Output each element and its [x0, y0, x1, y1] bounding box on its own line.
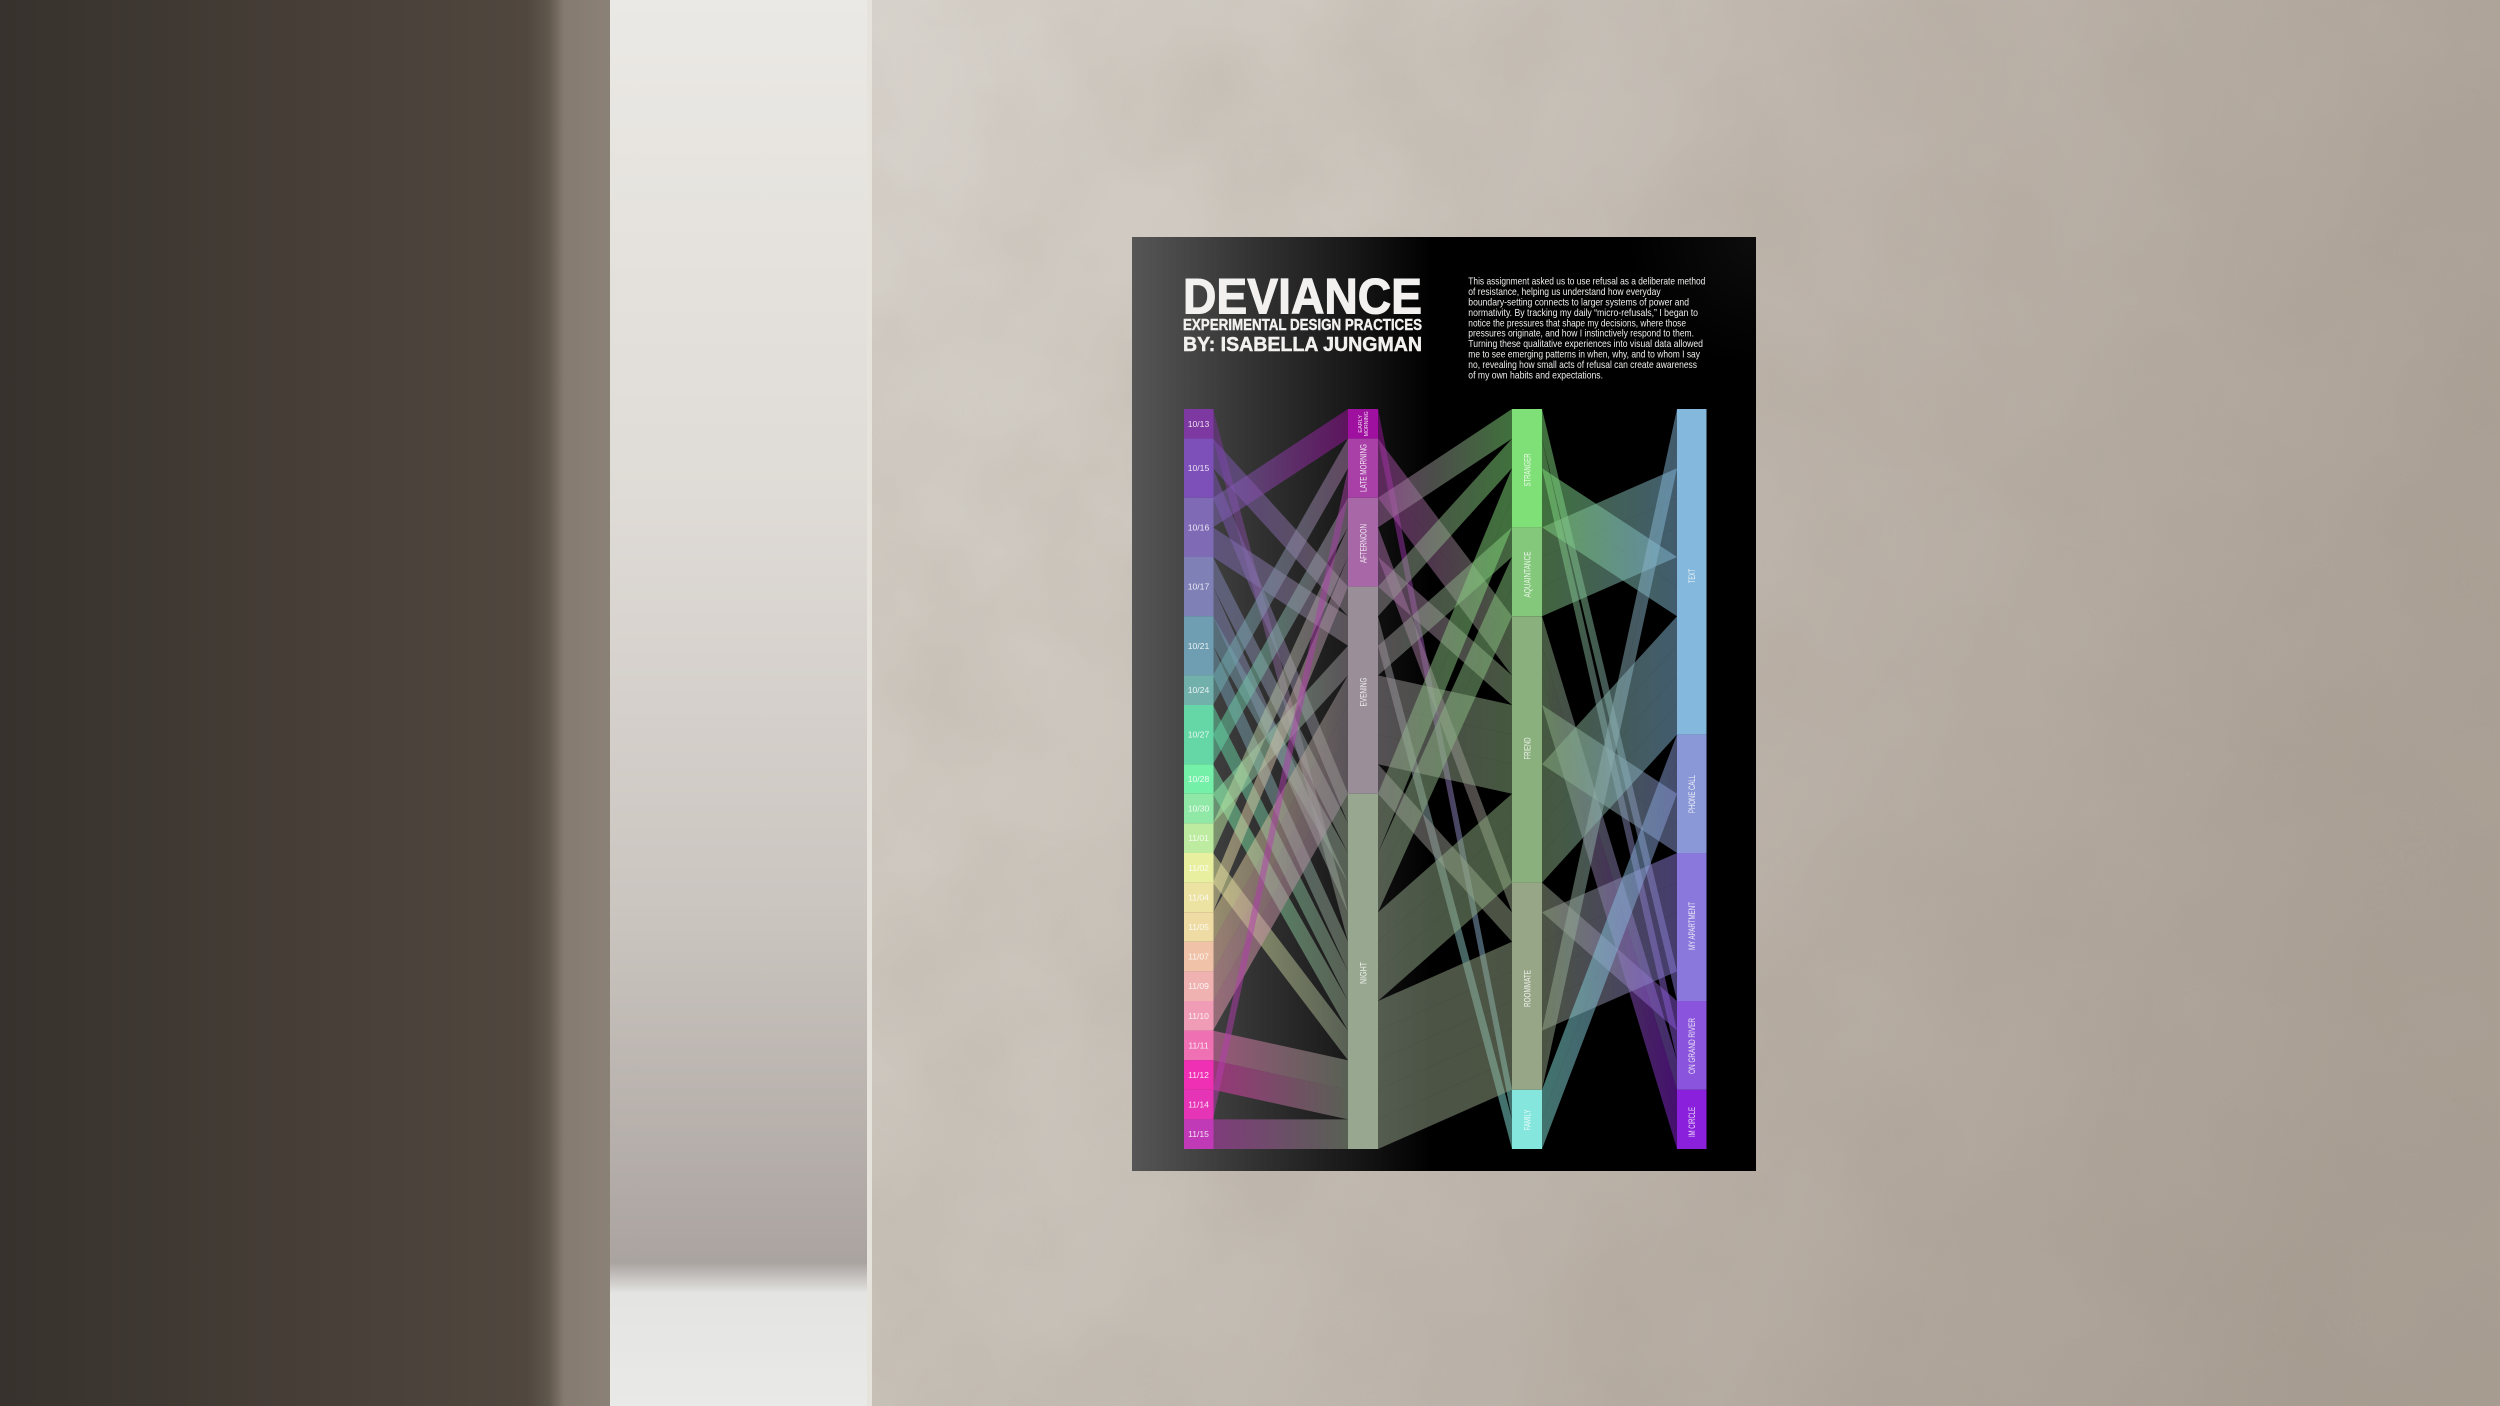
- node 11/04: 11/04: [1188, 892, 1209, 902]
- node early morning: [1348, 409, 1378, 439]
- node acquaintance: [1512, 527, 1542, 616]
- poster: [1132, 237, 1756, 1171]
- node 11/14: 11/14: [1188, 1100, 1209, 1110]
- node phone call: PHONE CALL: [1687, 775, 1697, 813]
- author line: BY: ISABELLA JUNGMAN: [1183, 333, 1422, 356]
- node evening: EVENING: [1358, 678, 1368, 706]
- node acquaintance: AQUAINTANCE: [1522, 552, 1532, 598]
- node 11/12: 11/12: [1188, 1070, 1209, 1080]
- description paragraph: [1468, 277, 1706, 381]
- column: channel or location: [1677, 409, 1706, 1149]
- node 11/12: [1184, 1060, 1214, 1090]
- node 11/01: [1184, 823, 1214, 853]
- description paragraph: of resistance, helping us understand how everyday: [1468, 287, 1661, 298]
- node roommate: ROOMMATE: [1522, 970, 1532, 1007]
- node 10/21: [1184, 616, 1214, 675]
- node my apartment: MY APARTMENT: [1687, 902, 1697, 950]
- sankey links: time of day to person: [1378, 409, 1512, 1149]
- node early morning: EARLY: [1358, 415, 1364, 433]
- description paragraph: notice the pressures that shape my decisions, where those: [1468, 318, 1686, 329]
- description paragraph: Turning these qualitative experiences into visual data allowed: [1468, 339, 1703, 350]
- node 11/07: 11/07: [1188, 952, 1209, 962]
- node late morning: LATE MORNING: [1358, 444, 1368, 492]
- node 11/02: [1184, 853, 1214, 883]
- node 10/16: 10/16: [1188, 522, 1209, 532]
- node friend: [1512, 616, 1542, 883]
- node 10/17: 10/17: [1188, 582, 1209, 592]
- node 10/24: 10/24: [1188, 685, 1209, 695]
- column: time of day: [1348, 409, 1378, 1149]
- node stranger: [1512, 409, 1542, 527]
- node text: [1677, 409, 1706, 735]
- node 11/11: 11/11: [1188, 1040, 1209, 1050]
- node 11/01: 11/01: [1188, 833, 1209, 843]
- node phone call: [1677, 735, 1706, 853]
- node 10/15: 10/15: [1188, 463, 1209, 473]
- node 11/02: 11/02: [1188, 863, 1209, 873]
- node 11/09: 11/09: [1188, 981, 1209, 991]
- node early morning: MORNING: [1364, 411, 1370, 436]
- node 10/16: [1184, 498, 1214, 557]
- background: bright gap with floor: [610, 0, 872, 1406]
- node 11/05: [1184, 912, 1214, 942]
- title: DEVIANCE: [1183, 268, 1422, 324]
- node 11/15: 11/15: [1188, 1129, 1209, 1139]
- title block: [1183, 268, 1422, 356]
- node evening: [1348, 587, 1378, 794]
- column: dates: [1184, 409, 1214, 1149]
- node 10/17: [1184, 557, 1214, 616]
- node 10/28: 10/28: [1188, 774, 1209, 784]
- node night: NIGHT: [1358, 962, 1368, 984]
- node stranger: STRANGER: [1522, 453, 1532, 486]
- description paragraph: no, revealing how small acts of refusal can create awareness: [1468, 360, 1697, 371]
- node 10/27: 10/27: [1188, 730, 1209, 740]
- node 11/10: 11/10: [1188, 1011, 1209, 1021]
- node 11/05: 11/05: [1188, 922, 1209, 932]
- node 10/27: [1184, 705, 1214, 764]
- node late morning: [1348, 439, 1378, 498]
- node 10/13: [1184, 409, 1214, 439]
- node 10/30: 10/30: [1188, 804, 1209, 814]
- node friend: FRIEND: [1522, 737, 1532, 760]
- node 10/15: [1184, 439, 1214, 498]
- node 11/14: [1184, 1090, 1214, 1119]
- node text: TEXT: [1687, 569, 1697, 583]
- node 10/13: 10/13: [1188, 419, 1209, 429]
- node im circle: [1677, 1090, 1706, 1149]
- sankey links: person to channel or location: [1542, 409, 1677, 1149]
- node 11/10: [1184, 1001, 1214, 1031]
- sankey links: date to time of day: [1213, 409, 1348, 1149]
- node night: [1348, 794, 1378, 1149]
- node my apartment: [1677, 853, 1706, 1001]
- node family: [1512, 1090, 1542, 1149]
- node afternoon: [1348, 498, 1378, 587]
- node im circle: IM CIRCLE: [1687, 1107, 1697, 1137]
- column: person: [1512, 409, 1542, 1149]
- node 11/11: [1184, 1031, 1214, 1060]
- node afternoon: AFTERNOON: [1358, 524, 1368, 563]
- description paragraph: boundary-setting connects to larger systems of power and: [1468, 297, 1689, 308]
- node on grand river: [1677, 1001, 1706, 1090]
- background: plaster wall: [867, 0, 2500, 1406]
- description paragraph: pressures originate, and how I instinctively respond to them.: [1468, 329, 1694, 340]
- node 10/30: [1184, 794, 1214, 823]
- node 11/15: [1184, 1119, 1214, 1149]
- subtitle: EXPERIMENTAL DESIGN PRACTICES: [1183, 317, 1422, 334]
- node 10/24: [1184, 675, 1214, 705]
- node on grand river: ON GRAND RIVER: [1687, 1018, 1697, 1074]
- description paragraph: normativity. By tracking my daily “micro-refusals,” I began to: [1468, 308, 1698, 319]
- background: dark blurred pillar: [0, 0, 612, 1406]
- node 11/07: [1184, 942, 1214, 971]
- node roommate: [1512, 883, 1542, 1090]
- node 11/04: [1184, 883, 1214, 912]
- node 10/21: 10/21: [1188, 641, 1209, 651]
- node 11/09: [1184, 971, 1214, 1001]
- node family: FAMILY: [1522, 1110, 1532, 1130]
- description paragraph: of my own habits and expectations.: [1468, 370, 1603, 381]
- description paragraph: me to see emerging patterns in when, why, and to whom I say: [1468, 349, 1701, 360]
- description paragraph: This assignment asked us to use refusal as a deliberate method: [1468, 277, 1706, 288]
- node 10/28: [1184, 764, 1214, 794]
